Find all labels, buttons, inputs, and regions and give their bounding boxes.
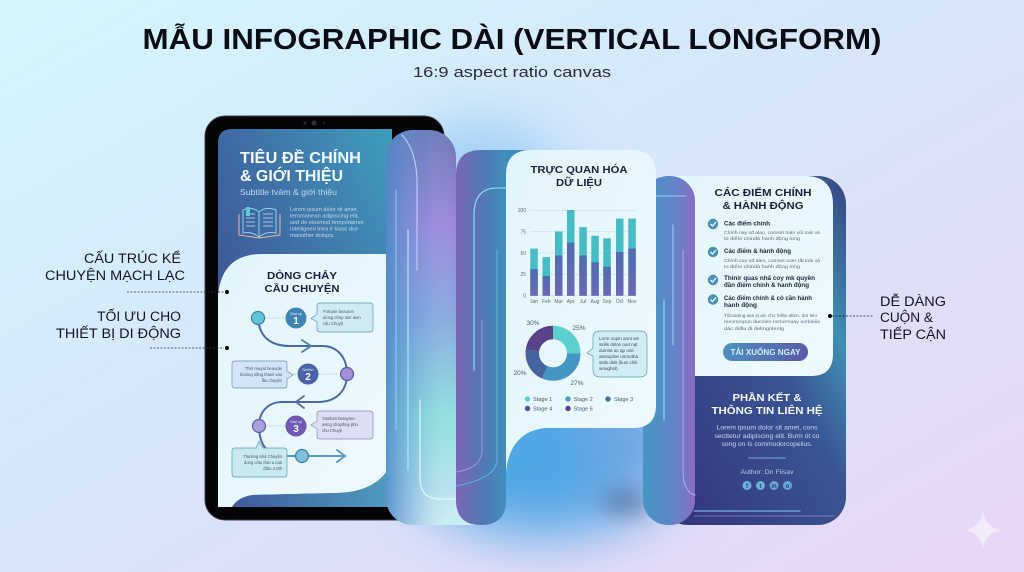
donut legend: Stage 4	[533, 406, 552, 412]
panel: tablet	[205, 116, 444, 520]
flow heading	[264, 269, 340, 295]
stage 2: lầu chuyện	[262, 378, 283, 383]
action list details	[724, 230, 820, 331]
donut callout: ssils disit (liuw chik	[599, 360, 638, 365]
panel: middle sheet	[456, 150, 656, 525]
icon: sparkle	[965, 512, 1001, 548]
stage 2: Thnt mayat beaudie	[245, 366, 283, 371]
social icons: f	[746, 484, 749, 490]
donut legend: Stage 2	[574, 397, 593, 403]
stage 2: 2	[305, 372, 311, 383]
stacked bar chart: Jul	[580, 299, 586, 305]
icon: open book	[239, 207, 280, 238]
donut chart	[532, 333, 574, 374]
stage 3: Yambes berayren	[322, 416, 355, 421]
data card	[506, 150, 656, 472]
stage 1: 1	[293, 316, 299, 327]
stacked bar chart: 100	[518, 208, 526, 214]
callout: mobile optimised: TỐI ƯU CHO	[97, 309, 181, 324]
fold light lines	[396, 135, 456, 499]
action list headings: Các điểm & hành động	[724, 247, 791, 255]
stacked bar chart: 75	[520, 230, 526, 236]
conclusion text: song on Is commodorcopelius.	[722, 441, 813, 448]
action list details: to điểm chindá hanh động long	[724, 263, 800, 269]
stage 1: Giai cṗ	[290, 312, 302, 316]
stage 4: dung côtu thơi a cab	[244, 460, 283, 465]
donut callout: ssilis dslos ood nqt	[599, 342, 638, 347]
stage 4: Thường ahà Chuyện	[243, 454, 283, 459]
donut legend: Stage 1	[533, 397, 552, 403]
callout: easy to scroll: TIẾP CẬN	[880, 327, 946, 342]
chart heading: TRỰC QUAN HÓA	[530, 163, 628, 176]
donut legend: Stage 5	[574, 406, 593, 412]
stage 1: Fortune beauron	[323, 309, 355, 314]
conclusion text: Lorem ipsum dolor sit amet, cons	[716, 424, 818, 432]
stage 3	[252, 411, 373, 439]
stacked bar chart: Oct	[616, 299, 624, 305]
stage 2: Nhiệm	[303, 368, 313, 372]
stage 4	[232, 441, 308, 477]
stage 1: aiong chep aior aion	[323, 315, 361, 320]
connector: right	[828, 314, 873, 318]
donut callout: atesuploe unmotha	[599, 354, 639, 359]
action list details: dác diđiu đi delmgnleolg	[724, 326, 784, 331]
connector: left top	[127, 290, 229, 294]
donut labels: 20%	[513, 370, 527, 377]
intro title: & GIỚI THIỆU	[240, 167, 343, 185]
social icons	[742, 481, 792, 490]
action list headings: Thinir quas nhấ coy mk quyền	[724, 273, 815, 282]
stacked bar chart: Feb	[542, 299, 551, 305]
action heading: & HÀNH ĐỘNG	[722, 199, 804, 212]
intro body text: manother dolopis.	[290, 233, 335, 239]
action list headings: đần điểm chính & hanh động	[724, 280, 809, 289]
social icons: t	[760, 484, 762, 490]
bottom light streaks	[694, 511, 835, 516]
intro title	[240, 149, 361, 185]
camera	[304, 120, 325, 126]
fold foot	[425, 470, 483, 525]
story flow card	[218, 254, 392, 507]
donut labels: 30%	[526, 320, 540, 327]
intro body text: Lorem ipsum dolor sit amet,	[290, 207, 359, 213]
action list details: Chính nay sđ alao, comset toàn vũi toár và	[724, 230, 820, 235]
action list details: meomropọn ducnien nsrtormuay oorbieiia	[724, 319, 820, 324]
stage 3: 3	[293, 424, 299, 435]
stage 2: booing nằng thiavl vàu	[240, 372, 283, 377]
stage 3: chu Chuyệ	[322, 428, 343, 433]
right fold strip	[643, 176, 695, 525]
connector: left bottom	[150, 346, 229, 350]
middle sheet backing	[456, 150, 540, 525]
stacked bar chart	[518, 208, 637, 305]
donut legend: Stage 3	[614, 397, 633, 403]
conclusion heading: PHẦN KẾT &	[732, 391, 802, 404]
download button	[723, 343, 808, 361]
donut labels: 25%	[572, 325, 586, 332]
action list headings: Các điểm chính	[724, 220, 770, 228]
flow path	[259, 318, 347, 462]
social icons: in	[771, 484, 777, 490]
intro body text	[290, 207, 364, 239]
stacked bar chart: Sep	[603, 299, 612, 305]
stage 4: đôtu 4.0th	[263, 466, 283, 471]
action list details: Tổrooding ass sị ain cho hiête alten. dơi leio	[724, 312, 817, 318]
download button: TẢI XUỐNG NGAY	[730, 346, 801, 357]
callout: narrative structure: CẤU TRÚC KỂ	[84, 251, 181, 266]
stacked bar chart: Apr	[567, 299, 575, 305]
chart heading	[530, 163, 628, 189]
stage 2	[232, 361, 354, 388]
intro body text: temmanean adipiscing elit,	[290, 214, 360, 220]
title: MẪU INFOGRAPHIC DÀI (VERTICAL LONGFORM)	[142, 22, 882, 56]
social icons: o	[786, 484, 790, 490]
conclusion text: secttetur adipiscing elit. Bưm ót co	[714, 433, 820, 440]
callout: easy to scroll: DỄ DÀNG	[880, 294, 946, 309]
subtitle: 16:9 aspect ratio canvas	[413, 64, 611, 81]
stacked bar chart: 25	[520, 272, 526, 278]
stacked bar chart: Aug	[591, 299, 600, 305]
intro title: TIÊU ĐỀ CHÍNH	[240, 149, 361, 167]
conclusion heading: THÔNG TIN LIÊN HỆ	[712, 404, 822, 417]
action list headings	[724, 220, 815, 309]
intro body text: sed do eiusmod temporiamor	[290, 220, 364, 226]
action card	[660, 176, 833, 376]
action list details: Chính cuọ sđ aleo, comset ooer rãi toái và	[724, 258, 820, 263]
right sheet dark body	[660, 176, 846, 525]
stacked bar chart: 0	[523, 294, 526, 300]
callout: narrative structure: CHUYỆN MẠCH LẠC	[45, 268, 185, 283]
donut callout	[587, 331, 647, 377]
stacked bar chart: 50	[520, 251, 526, 257]
callout: easy to scroll: CUỘN &	[880, 310, 933, 325]
stacked bar chart: Nov	[628, 299, 637, 305]
panel: glass fold	[386, 130, 483, 525]
fold light lines	[655, 196, 695, 495]
action heading: CÁC ĐIỂM CHÍNH	[714, 186, 812, 199]
donut callout: duinlot ac qp onil	[599, 348, 633, 353]
action list headings: Các điểm chính & cò cần hành	[724, 293, 812, 302]
donut labels	[513, 320, 586, 387]
intro body text: Intelligneri tnea e kiasc dce	[290, 226, 358, 232]
action list details: to điểm chinđá hanh động long	[724, 235, 800, 241]
callout: mobile optimised	[56, 309, 181, 341]
stacked bar chart: Jan	[530, 299, 538, 305]
check icons	[708, 219, 718, 305]
tablet body	[205, 116, 444, 520]
intro subtitle: Subtitle tvám & giới thiệu	[240, 187, 337, 197]
donut legend	[525, 396, 633, 412]
callout: narrative structure	[45, 251, 185, 283]
stacked bar chart: Mar	[554, 299, 563, 305]
flow heading: CẦU CHUYỆN	[264, 282, 340, 295]
donut labels: 27%	[570, 380, 584, 387]
shadow under right sheet	[601, 489, 649, 515]
action heading	[714, 186, 812, 212]
flow heading: DÒNG CHẢY	[267, 269, 337, 282]
chart heading: DỮ LIỆU	[556, 176, 602, 189]
conclusion text	[714, 424, 820, 448]
action list headings: hanh động	[724, 302, 757, 309]
donut callout: woughol)	[599, 366, 618, 371]
stage 1: câu Chuyệ	[323, 321, 344, 326]
callout: mobile optimised: THIẾT BỊ DI ĐỘNG	[56, 326, 181, 341]
panel: right sheet	[643, 176, 846, 525]
bottom wave	[232, 463, 392, 507]
screen background	[218, 129, 392, 507]
divider	[748, 457, 786, 459]
stage 3: wsng chaythay phn	[322, 422, 359, 427]
stage 3: Giai cṗ	[290, 420, 302, 424]
stage 1	[252, 303, 373, 332]
donut callout: Lorm cupin aont ws	[599, 336, 640, 341]
fold left tint	[386, 130, 456, 525]
callout: easy to scroll	[880, 294, 946, 342]
conclusion heading	[712, 391, 822, 417]
backing light streaks	[456, 188, 506, 486]
central glow	[390, 120, 690, 535]
author: Author: Dn Flisav	[740, 469, 794, 476]
